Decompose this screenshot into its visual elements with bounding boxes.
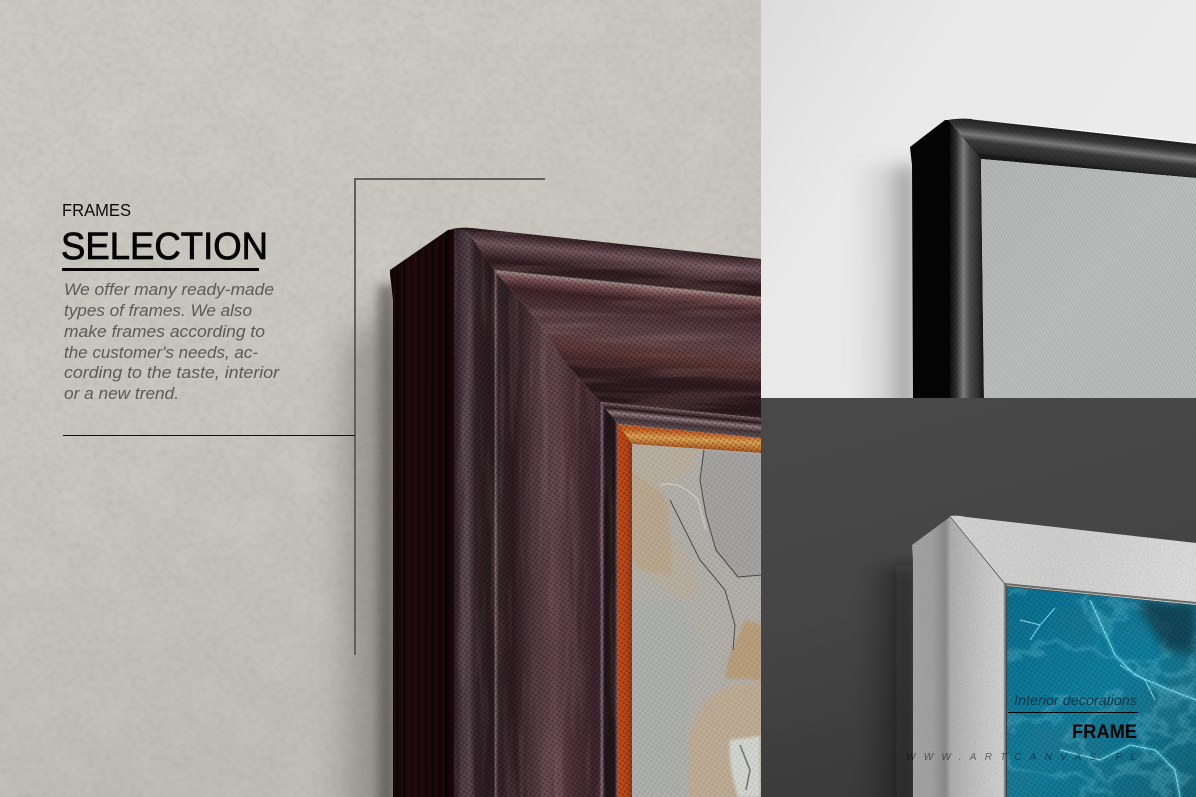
text block: description: make frames according to (64, 322, 265, 341)
heading underline (62, 268, 259, 271)
caption rule (1008, 712, 1138, 713)
watermark url: WWW.ARTCANVAS.PL (906, 752, 1136, 763)
L-shaped connector line (355, 179, 545, 655)
panel: beige wall with maroon frame (0, 0, 761, 797)
text block: description: types of frames. We also (64, 301, 252, 320)
horizontal rule under description (63, 435, 355, 436)
panel: light wall with black frame (761, 0, 1196, 425)
text block: description: cording to the taste, interior (64, 363, 280, 382)
silver frame (912, 515, 1196, 797)
canvas in black frame (981, 159, 1196, 398)
label: frames: FRAMES (62, 200, 131, 220)
caption: frame: FRAME (1072, 722, 1137, 743)
painting in maroon frame (632, 444, 761, 797)
text block: selection heading (61, 200, 268, 271)
maroon frame (390, 228, 761, 797)
text block: description: We offer many ready-made (64, 280, 274, 299)
panel: dark wall with silver frame (761, 398, 1196, 797)
text block: description: the customer's needs, ac- (64, 343, 258, 362)
text block: description (64, 280, 280, 403)
teal painting (1007, 585, 1196, 797)
heading: selection: SELECTION (61, 226, 268, 268)
caption: interior decorations: Interior decorations (1014, 692, 1137, 708)
text block: description: or a new trend. (64, 384, 179, 403)
black frame (910, 119, 1196, 398)
